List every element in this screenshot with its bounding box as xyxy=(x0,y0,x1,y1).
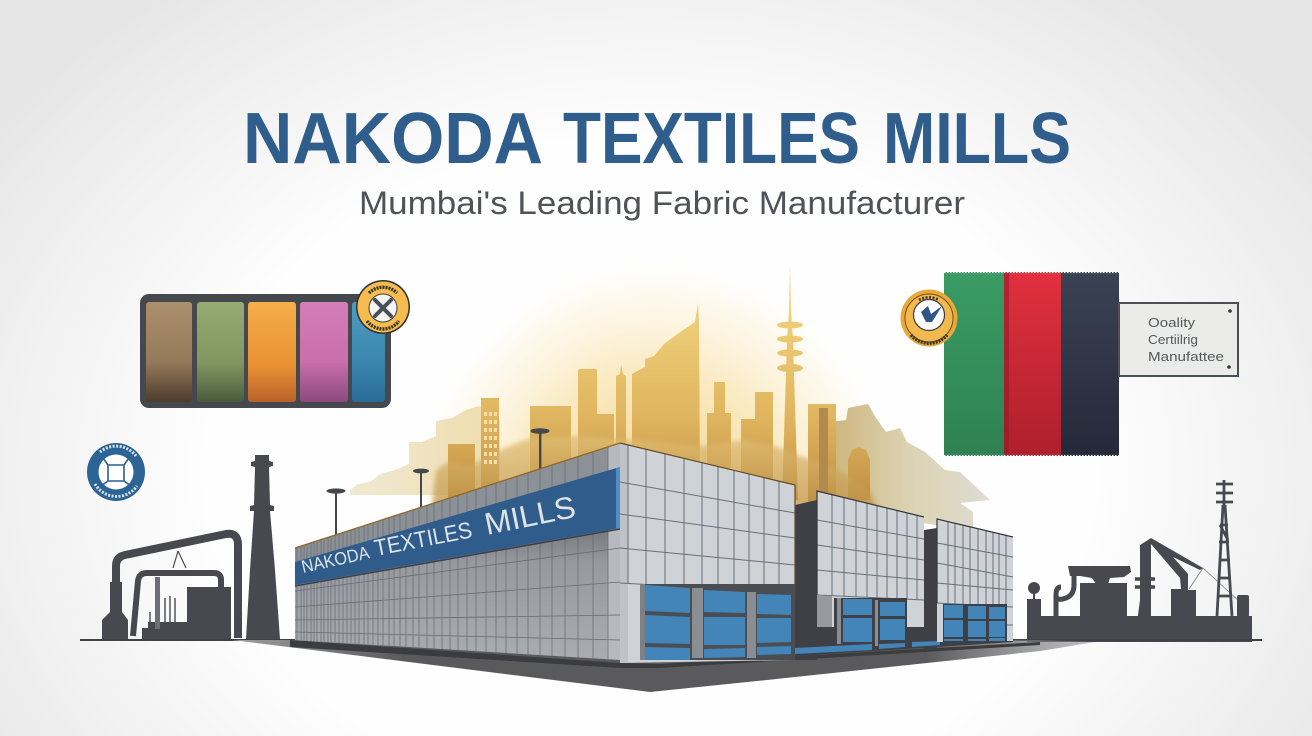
golden city skyline xyxy=(350,264,990,527)
side tank xyxy=(1237,595,1249,617)
blue sign band xyxy=(295,467,620,586)
low plant block xyxy=(142,622,187,639)
title xyxy=(243,99,1071,179)
badge: blue emblem xyxy=(87,443,145,501)
tank with top disc xyxy=(1068,566,1131,617)
front facade xyxy=(295,443,620,660)
fabric rolls and quality label xyxy=(900,272,1238,456)
crane cables xyxy=(1189,568,1240,602)
skyline towers xyxy=(448,263,870,504)
right wing xyxy=(937,519,1013,642)
title: MILLS xyxy=(883,99,1071,179)
sign text: MILLS xyxy=(481,489,579,542)
hanger xyxy=(173,551,186,568)
swatch: brown xyxy=(146,302,192,402)
badge: crossed tools xyxy=(356,280,410,334)
sun glow xyxy=(453,282,852,505)
lamp xyxy=(413,469,429,523)
red fabric xyxy=(1004,272,1061,456)
subtitle: Mumbai's Leading Fabric Manufacturer xyxy=(359,185,965,221)
right industrial silhouette xyxy=(1027,480,1252,642)
left haze silhouette xyxy=(350,406,500,495)
radio tower with discs xyxy=(777,263,803,500)
valve post xyxy=(1027,582,1041,617)
darker lower city layer xyxy=(432,436,880,525)
lamp xyxy=(326,488,346,538)
crane xyxy=(1140,538,1203,617)
sign text xyxy=(300,489,579,577)
chimney xyxy=(246,455,280,639)
sign text: NAKODA xyxy=(300,542,371,577)
right haze silhouette xyxy=(830,404,990,530)
quality label xyxy=(1119,303,1238,376)
left industrial silhouette xyxy=(102,455,280,640)
swatch: pink xyxy=(300,302,348,402)
badge: gold seal xyxy=(900,290,958,346)
small pipe xyxy=(133,573,221,636)
swatch: orange xyxy=(248,302,296,402)
plant poles xyxy=(150,596,175,622)
main wing glass panels xyxy=(620,443,795,663)
connecting dark walls xyxy=(795,500,817,660)
sign text: TEXTILES xyxy=(372,516,474,561)
tower windows xyxy=(484,412,497,464)
main wing windows xyxy=(640,584,795,660)
green fabric xyxy=(944,272,1004,456)
ladder xyxy=(155,577,160,629)
quality label: Ooality xyxy=(1148,316,1196,330)
navy fabric xyxy=(1061,272,1119,456)
quality label: Certiilrig xyxy=(1148,333,1198,347)
title: TEXTILES xyxy=(563,99,860,179)
fabric swatch panel xyxy=(140,280,410,408)
factory building xyxy=(295,443,1013,663)
ground line xyxy=(80,639,1262,641)
pipe base xyxy=(102,582,128,640)
machine block xyxy=(187,587,231,639)
lattice tower xyxy=(1216,480,1233,616)
street lamps xyxy=(326,428,550,538)
lamp xyxy=(530,428,550,487)
plant base xyxy=(1027,616,1252,642)
curled pipe xyxy=(1056,569,1080,616)
large pipe xyxy=(116,534,238,638)
quality label: Manufattee xyxy=(1148,350,1224,364)
middle wing xyxy=(795,491,940,654)
swatch: blue xyxy=(352,302,385,402)
road xyxy=(232,640,1095,692)
swatch: green xyxy=(197,302,244,402)
title: NAKODA xyxy=(243,99,543,179)
